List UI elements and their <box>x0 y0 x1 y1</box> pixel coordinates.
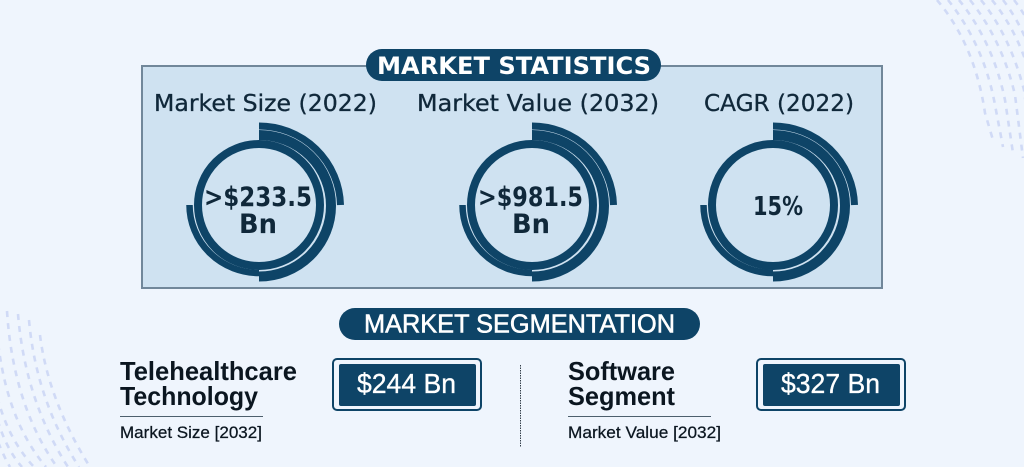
value box: $244 Bn <box>333 359 481 410</box>
ring chart: market value: Bn <box>512 209 550 240</box>
label: market size: Market Size (2022) <box>154 91 377 117</box>
segment: software: Software <box>568 356 675 386</box>
segment: software: Segment <box>568 381 675 411</box>
ring chart: cagr: 15% <box>753 192 803 222</box>
segment: software <box>568 356 721 442</box>
ring chart: market value: >$981.5 <box>478 182 583 213</box>
value box: $244 Bn: $244 Bn <box>357 368 456 399</box>
ring chart: market value <box>462 126 614 276</box>
ring chart: market size: Bn <box>239 209 277 240</box>
label: market value: Market Value (2032) <box>417 91 659 117</box>
label: cagr: CAGR (2022) <box>704 91 854 117</box>
ring chart: cagr <box>704 126 854 276</box>
value box: $327 Bn <box>757 359 905 410</box>
segment: telehealthcare technology: Telehealthcare <box>120 356 297 386</box>
heading: market segmentation: MARKET SEGMENTATION <box>364 308 675 338</box>
heading: market statistics: MARKET STATISTICS <box>377 52 651 80</box>
value box: $327 Bn: $327 Bn <box>781 368 880 399</box>
ring chart: market size: >$233.5 <box>204 182 312 213</box>
segment: telehealthcare technology: Market Size [2032] <box>120 423 262 442</box>
segment: telehealthcare technology <box>120 356 297 442</box>
segment: software: Market Value [2032] <box>568 423 721 442</box>
segment: telehealthcare technology: Technology <box>120 381 259 411</box>
panel: market statistics <box>142 66 882 288</box>
ring chart: market size <box>190 126 340 276</box>
